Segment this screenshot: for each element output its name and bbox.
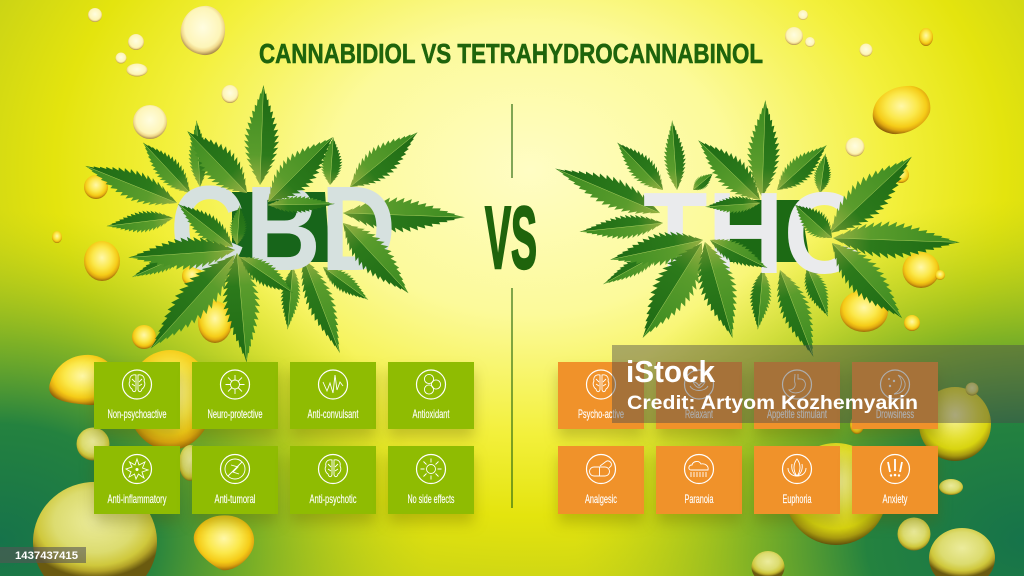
card: Anxiety: Anxiety (882, 492, 908, 506)
oil drops: right side (752, 10, 995, 576)
back leaflets (549, 99, 838, 362)
card: Anti-psychotic: Anti-psychotic (310, 492, 356, 506)
card: Relaxant: Relaxant (685, 407, 713, 421)
card: Anti-convulsant (290, 362, 376, 429)
title: CANNABIDIOL VS TETRAHYDROCANNABINOL (259, 38, 763, 69)
card: Psycho-active: Psycho-active (578, 407, 624, 421)
oil drops: upper left (52, 6, 238, 349)
card: Antioxidant: Antioxidant (412, 407, 450, 421)
card: No side effects (388, 446, 474, 514)
front leaflets (127, 118, 421, 364)
card: Non-psychoactive: Non-psychoactive (108, 407, 167, 421)
watermark logo: iStock (626, 354, 716, 389)
card: No side effects: No side effects (408, 492, 454, 506)
card: Relaxant (656, 362, 742, 429)
card: Anti-convulsant: Anti-convulsant (308, 407, 359, 421)
CBD cannabis leaf with letters (79, 84, 466, 364)
card: Anti-inflammatory (94, 446, 180, 514)
card: Paranoia (656, 446, 742, 514)
card: Appetite stimulant (754, 362, 840, 429)
THC effect cards (558, 362, 938, 514)
card: Anti-inflammatory: Anti-inflammatory (108, 492, 166, 506)
letters THC: THC (643, 168, 860, 298)
text: VS (485, 188, 537, 287)
card: Non-psychoactive (94, 362, 180, 429)
card: Appetite stimulant: Appetite stimulant (767, 407, 827, 421)
card: Psycho-active (558, 362, 644, 429)
card: Anti-tumoral: Anti-tumoral (214, 492, 256, 506)
card: Antioxidant (388, 362, 474, 429)
image id badge: 1437437415 (15, 550, 78, 562)
card: Euphoria (754, 446, 840, 514)
card: Drowsiness: Drowsiness (876, 407, 914, 421)
card: Anti-psychotic (290, 446, 376, 514)
watermark credit: Credit: Artyom Kozhemyakin (627, 393, 918, 414)
watermark banner (612, 345, 1024, 423)
card: Neuro-protective (192, 362, 278, 429)
oil drops: lower left (33, 350, 254, 576)
card: Analgesic: Analgesic (585, 492, 617, 506)
card: Euphoria: Euphoria (782, 492, 812, 506)
card: Anxiety (852, 446, 938, 514)
card: Drowsiness (852, 362, 938, 429)
card: Analgesic (558, 446, 644, 514)
card: Paranoia: Paranoia (684, 492, 714, 506)
card: Anti-tumoral (192, 446, 278, 514)
front leaflets (607, 142, 961, 349)
THC cannabis leaf with letters (549, 99, 961, 362)
card: Neuro-protective: Neuro-protective (208, 407, 263, 421)
image id badge (0, 547, 86, 563)
CBD benefit cards (94, 362, 474, 514)
back leaflets (79, 84, 466, 358)
letters CBD: CBD (170, 160, 396, 296)
